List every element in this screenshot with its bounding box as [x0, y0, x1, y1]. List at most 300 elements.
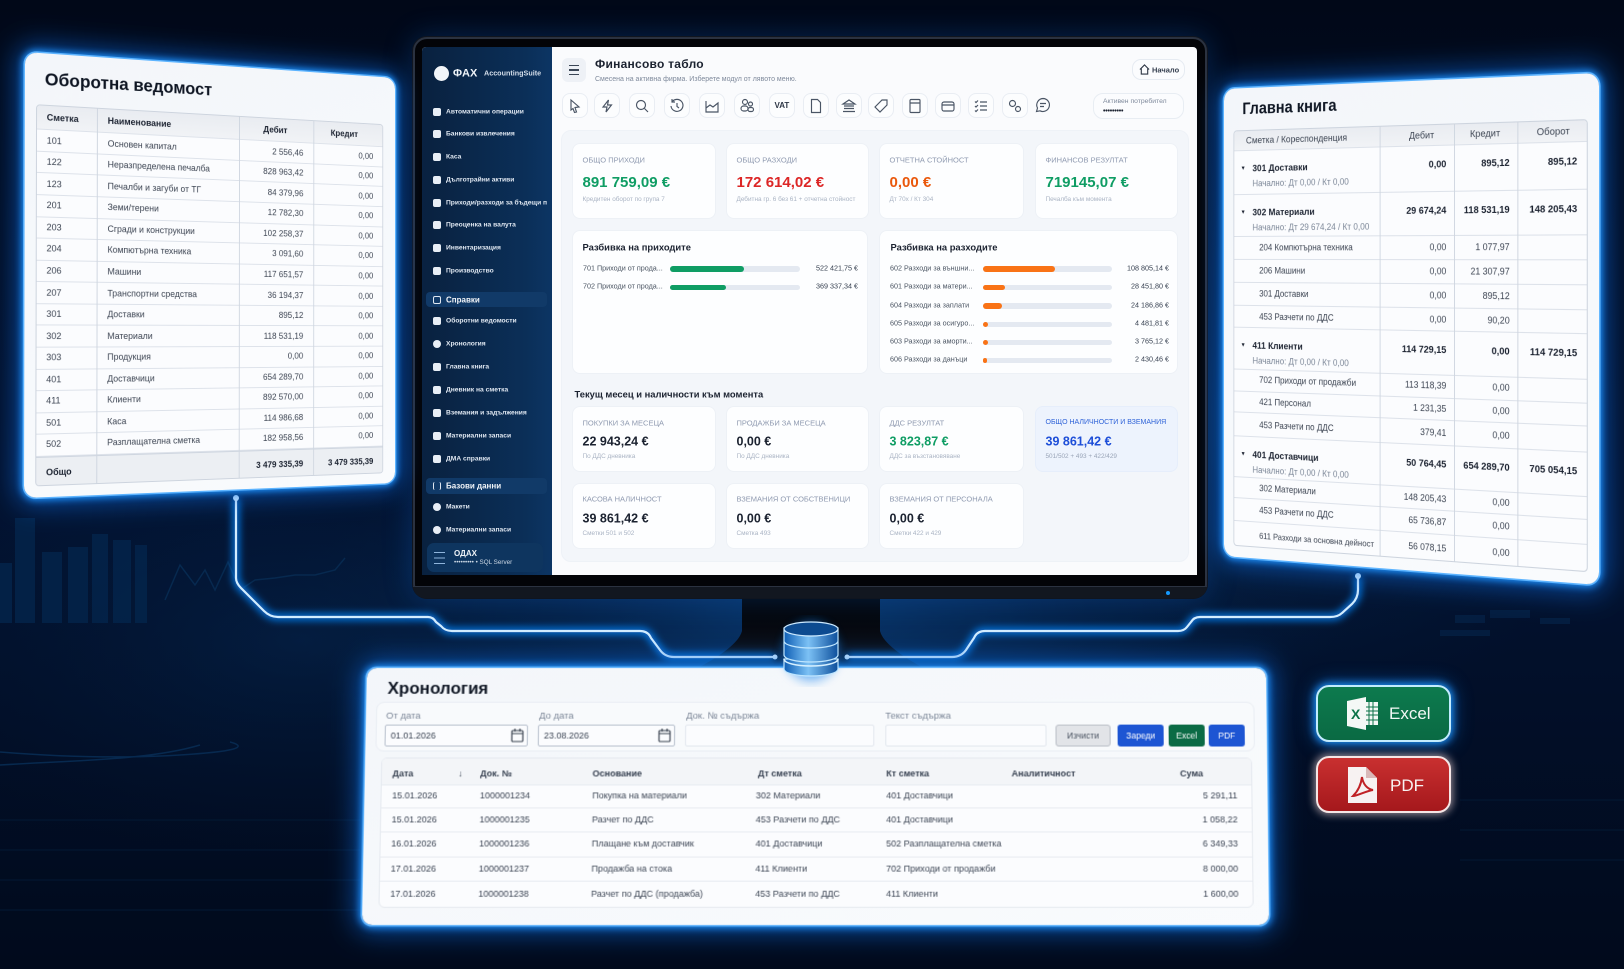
card: staff receivables: 0,00 € — [890, 512, 924, 526]
row: 302 Материали — [756, 790, 820, 800]
row — [37, 217, 382, 247]
date input: to — [538, 725, 675, 747]
monitor bezel chin — [413, 586, 1207, 598]
row: 206 — [46, 266, 62, 276]
account group: 301: 0,00 — [1429, 159, 1446, 171]
row — [379, 881, 1253, 907]
card: total holdings: 39 861,42 € — [1046, 434, 1112, 448]
row: 0,00 — [358, 171, 373, 181]
product name: AccountingSuite — [484, 69, 541, 78]
account group: 411 — [1234, 328, 1586, 380]
row: Разчет по ДДС (продажба) — [591, 888, 703, 898]
card: VAT result: ДДС РЕЗУЛТАТ — [890, 418, 944, 428]
panel: Оборотна ведомост — [24, 52, 395, 498]
sub row: 90,20 — [1488, 314, 1510, 325]
bar row: 605 Разходи за осигуро... — [890, 319, 974, 328]
bar row: 701 Приходи от прода... — [583, 264, 663, 273]
sub row — [1234, 236, 1586, 260]
page subtitle: Смесена на активна фирма. Изберете модул от лявото меню. — [595, 76, 797, 83]
panel: Главна книга — [1224, 73, 1599, 585]
label: Текст съдържа — [885, 711, 951, 722]
tool: tag — [868, 93, 894, 118]
bar row: 522 421,75 € — [816, 264, 858, 273]
sub row — [1234, 260, 1586, 286]
header row: Дебит — [1409, 129, 1434, 141]
bar row: 601 Разходи за матери... — [890, 282, 973, 291]
section highlight: Базови данни — [426, 478, 547, 494]
sub row: 453 Разчети по ДДС — [1259, 420, 1334, 433]
main area — [561, 57, 1189, 562]
row: 122 — [47, 157, 62, 168]
home button — [1132, 59, 1185, 80]
row: 0,00 — [358, 391, 373, 401]
card: VAT result: 3 823,87 € — [890, 434, 949, 448]
date input: from — [385, 725, 528, 747]
account group: 302: Начално: Дт 29 674,24 / Кт 0,00 — [1252, 222, 1369, 233]
header row: Основание — [592, 768, 642, 778]
row — [36, 347, 382, 369]
row: Сгради и конструкции — [107, 224, 195, 236]
menu item: Главна книга — [446, 364, 489, 370]
button: clear — [1055, 725, 1111, 747]
row — [380, 857, 1252, 881]
row — [36, 367, 382, 391]
section heading: Текущ месец и наличности към момента — [574, 388, 763, 399]
sub row: 0,00 — [1430, 314, 1446, 324]
tool: calculator — [902, 93, 928, 118]
row: 12 782,30 — [268, 208, 303, 218]
row — [36, 282, 382, 307]
row: 401 — [46, 374, 61, 384]
sub row: 301 Доставки — [1259, 289, 1308, 299]
row: 0,00 — [358, 311, 373, 320]
row: 702 Приходи от продажби — [886, 863, 995, 873]
sub row: 0,00 — [1492, 429, 1510, 441]
row: 204 — [46, 244, 62, 254]
row: 118 531,19 — [264, 331, 303, 341]
row: 0,00 — [358, 231, 373, 241]
menu item: Оборотни ведомости — [446, 318, 517, 324]
menu item: Приходи/разходи за бъдещи п — [446, 200, 547, 206]
bar row — [890, 355, 1169, 364]
row — [37, 173, 382, 207]
row: Доставки — [107, 309, 145, 320]
row: Продукция — [107, 352, 151, 362]
bar row: 603 Разходи за аморти... — [890, 337, 973, 346]
tool: document — [803, 93, 829, 118]
sub row: 421 Персонал — [1259, 397, 1311, 409]
row: 411 Клиенти — [755, 863, 807, 873]
card: cash: КАСОВА НАЛИЧНОСТ — [582, 494, 662, 504]
tool: history — [664, 93, 690, 118]
text input: text — [885, 725, 1047, 747]
card: total holdings: ОБЩО НАЛИЧНОСТИ И ВЗЕМАНИЯ — [1046, 419, 1166, 426]
bar row — [890, 264, 1169, 273]
row — [36, 304, 382, 327]
card: cash: Сметки 501 и 502 — [582, 530, 634, 537]
row: 16.01.2026 — [391, 838, 437, 848]
screen — [422, 47, 1197, 575]
account group: 411: 0,00 — [1492, 346, 1510, 358]
row — [36, 406, 382, 435]
row: 0,00 — [358, 331, 373, 340]
tool: card — [935, 93, 961, 118]
card: financial result: Печалба към момента — [1046, 196, 1112, 203]
row: 411 Клиенти — [886, 888, 938, 898]
account group: 302: 302 Материали — [1252, 207, 1315, 218]
bar row — [890, 337, 1169, 346]
row: 401 Доставчици — [755, 838, 822, 848]
monitor stand — [702, 599, 919, 666]
header row — [1234, 120, 1586, 152]
row: 502 — [46, 439, 61, 450]
account group: 401: 654 289,70 — [1463, 460, 1510, 474]
heading: Оборотна ведомост — [45, 69, 212, 99]
header row — [37, 105, 382, 148]
row: 207 — [46, 287, 61, 298]
menu item — [433, 153, 462, 161]
heading: Хронология — [387, 679, 488, 698]
card: cash — [572, 483, 716, 549]
row: 3 091,60 — [272, 249, 303, 259]
card: owner receivables — [726, 483, 869, 549]
sub row: 56 078,15 — [1408, 541, 1446, 554]
row: 0,00 — [358, 151, 373, 161]
row — [37, 130, 382, 167]
row: 1000001238 — [478, 888, 529, 898]
card: VAT result — [879, 406, 1024, 472]
row — [37, 239, 382, 267]
row: Разплащателна сметка — [107, 436, 200, 448]
sub row: 0,00 — [1492, 547, 1510, 559]
button: pdf: PDF — [1218, 731, 1235, 741]
home button: Начало — [1152, 66, 1179, 74]
card: staff receivables — [879, 483, 1024, 549]
header row: Дебит — [263, 124, 287, 135]
card: total income: 891 759,09 € — [582, 174, 670, 191]
row: Клиенти — [107, 395, 141, 405]
button: clear: Изчисти — [1067, 731, 1099, 741]
menu item: Преоценка на валута — [446, 222, 516, 228]
tool: settings — [1002, 93, 1028, 118]
sub row: 0,00 — [1430, 266, 1446, 277]
server name: ••••••••• • SQL Server — [454, 559, 512, 566]
bar row: 2 430,46 € — [1135, 355, 1169, 364]
row: 303 — [46, 352, 61, 363]
sub row — [1234, 283, 1586, 310]
sub row — [1234, 391, 1586, 427]
sub row: 1 231,35 — [1413, 402, 1446, 414]
row: 0,00 — [358, 271, 373, 280]
tool: cursor — [562, 93, 588, 118]
bar row: 369 337,34 € — [816, 282, 858, 291]
total row: 3 479 335,39 — [328, 456, 373, 467]
account group: 301: 895,12 — [1548, 156, 1577, 168]
row: 1000001236 — [479, 838, 530, 848]
heading: Разбивка на приходите — [582, 241, 691, 252]
sub row: 206 Машини — [1259, 266, 1305, 276]
active user — [1093, 93, 1184, 119]
account group: 401: 705 054,15 — [1529, 463, 1577, 478]
row: 1000001235 — [479, 814, 530, 824]
menu item — [433, 455, 490, 463]
row: 0,00 — [358, 211, 373, 221]
row — [37, 195, 382, 227]
row — [37, 152, 382, 187]
account group: 302: ▾ — [1242, 209, 1245, 216]
card: reporting value: ОТЧЕТНА СТОЙНОСТ — [890, 156, 969, 164]
sub row: 0,00 — [1492, 405, 1510, 416]
card: total income: Кредитен оборот по група 7 — [582, 196, 665, 203]
bar row: 24 186,86 € — [1131, 301, 1169, 310]
logo mark — [434, 66, 449, 81]
account group: 411: ▾ — [1242, 342, 1245, 349]
card: sales: 0,00 € — [736, 434, 771, 448]
row: Материали — [107, 331, 153, 341]
header row: Кт сметка — [886, 768, 929, 778]
card: owner receivables: Сметка 493 — [736, 530, 771, 537]
account group: 302: 118 531,19 — [1464, 204, 1510, 216]
button: load — [1118, 725, 1164, 747]
card: total income — [572, 143, 716, 219]
row: 411 — [46, 396, 61, 406]
bar row — [583, 282, 858, 291]
row: 654 289,70 — [263, 372, 303, 382]
header row: Док. № — [480, 768, 512, 778]
sub row — [1234, 306, 1586, 334]
bar row — [890, 319, 1169, 328]
button: excel — [1169, 725, 1205, 747]
row: Доставчици — [107, 373, 155, 384]
menu item: Материални запаси — [446, 432, 511, 440]
sub row: 379,41 — [1420, 426, 1446, 438]
account group: 302: 148 205,43 — [1529, 203, 1577, 216]
menu item: Банкови извлечения — [446, 130, 515, 138]
sub row: 0,00 — [1492, 382, 1510, 393]
account group: 301: ▾ — [1242, 165, 1245, 172]
card: cash: 39 861,42 € — [582, 512, 649, 526]
header row: Кредит — [1470, 127, 1500, 140]
card: financial result: 719145,07 € — [1046, 174, 1129, 191]
row: Разчет по ДДС — [592, 814, 654, 824]
row — [36, 326, 382, 348]
row: 1000001234 — [480, 790, 530, 800]
account group: 301 — [1234, 142, 1586, 195]
account group: 301: 895,12 — [1481, 157, 1510, 170]
header row: Сметка / Кореспонденция — [1246, 132, 1347, 146]
label: От дата — [386, 711, 421, 722]
account group: 302 — [1234, 190, 1586, 237]
bar row — [583, 264, 858, 273]
label: До дата — [539, 711, 574, 722]
table — [378, 757, 1254, 908]
header row: Дата — [392, 768, 414, 778]
row: Каса — [107, 416, 126, 427]
label: Док. № съдържа — [686, 711, 759, 722]
section: Базови данни: Базови данни — [446, 482, 501, 490]
button: excel: Excel — [1176, 731, 1197, 741]
row: 15.01.2026 — [392, 790, 437, 800]
row — [36, 426, 382, 457]
sub row: 0,00 — [1492, 520, 1510, 532]
date input: to: 23.08.2026 — [544, 730, 589, 740]
row: 17.01.2026 — [390, 888, 436, 898]
row: Покупка на материали — [592, 790, 687, 800]
sub row: 453 Разчети по ДДС — [1259, 311, 1334, 322]
account group: 401: Начално: Дт 0,00 / Кт 0,00 — [1252, 465, 1349, 480]
bar row: 108 805,14 € — [1127, 264, 1169, 273]
row: 36 194,37 — [268, 290, 303, 300]
sub row: 21 307,97 — [1471, 266, 1510, 277]
bar row: 28 451,80 € — [1131, 282, 1169, 291]
row: 0,00 — [358, 351, 373, 360]
sub row: 302 Материали — [1259, 483, 1316, 497]
total row: Общо — [46, 466, 72, 477]
row: 2 556,46 — [272, 147, 303, 157]
tool: chart — [699, 93, 725, 118]
sub row: 65 736,87 — [1408, 515, 1446, 528]
sub row: 453 Разчети по ДДС — [1259, 505, 1334, 520]
icon: excel: X — [1351, 706, 1361, 722]
button: pdf — [1209, 725, 1245, 747]
row: 0,00 — [358, 431, 373, 441]
menu item: ДМА справки — [446, 456, 490, 462]
sub row — [1234, 498, 1586, 545]
row: 301 — [46, 309, 61, 319]
row: 0,00 — [288, 351, 303, 361]
bar row: 3 765,12 € — [1135, 337, 1169, 346]
menu button — [562, 58, 586, 82]
text input: doc — [685, 725, 874, 747]
logo — [434, 66, 541, 81]
panel: expense breakdown — [879, 230, 1178, 374]
button: Excel export — [1316, 685, 1451, 742]
card: sales: По ДДС дневника — [736, 453, 789, 460]
firm name: ОДАХ — [454, 549, 477, 558]
row: 0,00 — [358, 411, 373, 421]
bar row: 4 481,81 € — [1135, 319, 1169, 328]
account group: 401: ▾ — [1242, 451, 1245, 458]
menu item: Производство — [446, 268, 494, 274]
row: 828 963,42 — [263, 167, 303, 178]
header row: Оборот — [1537, 125, 1570, 138]
account group: 411: 114 729,15 — [1530, 347, 1577, 360]
card: purchases: ПОКУПКИ ЗА МЕСЕЦА — [582, 418, 664, 428]
card: staff receivables: ВЗЕМАНИЯ ОТ ПЕРСОНАЛА — [890, 494, 993, 504]
database icon — [434, 552, 445, 564]
account group: 411: 411 Клиенти — [1252, 341, 1303, 353]
card: owner receivables: ВЗЕМАНИЯ ОТ СОБСТВЕНИЦИ — [736, 494, 850, 504]
menu item — [433, 340, 486, 348]
date input: from: 01.01.2026 — [391, 730, 436, 740]
row: 401 Доставчици — [886, 790, 953, 800]
row: 123 — [47, 179, 62, 189]
bar row — [890, 282, 1169, 291]
row: 6 349,33 — [1203, 838, 1238, 848]
row: 203 — [46, 222, 62, 233]
tool: VAT — [769, 93, 795, 118]
header row — [382, 758, 1251, 784]
menu item: Дневник на сметка — [446, 386, 508, 394]
row: 892 570,00 — [263, 392, 303, 402]
page title: Финансово табло — [595, 57, 704, 71]
sub row: 1 077,97 — [1475, 242, 1510, 253]
total row: 3 479 335,39 — [256, 459, 303, 470]
card: total expenses: Дебитна гр. 6 без 61 + отчетна стойност — [736, 196, 855, 203]
table — [1233, 119, 1587, 572]
card: reporting value: Дт 70x / Кт 304 — [890, 196, 933, 203]
card: purchases — [572, 406, 716, 472]
row: Плащане към доставчик — [592, 838, 694, 848]
menu item: Хронология — [446, 340, 486, 348]
card: reporting value: 0,00 € — [890, 174, 931, 191]
sidebar footer — [427, 543, 543, 572]
active user: ••••••••• — [1103, 108, 1123, 115]
active user: Активен потребител — [1103, 98, 1167, 105]
sub row: 702 Приходи от продажби — [1259, 375, 1356, 388]
sub row: 204 Компютърна техника — [1259, 242, 1353, 253]
filter bar — [375, 702, 1255, 751]
bar row: 702 Приходи от прода... — [583, 282, 663, 291]
row: 895,12 — [279, 311, 303, 320]
heading: Разбивка на разходите — [890, 241, 998, 252]
row: 502 Разплащателна сметка — [886, 838, 1001, 848]
card: owner receivables: 0,00 € — [736, 512, 771, 526]
row: 15.01.2026 — [392, 814, 437, 824]
row: Транспортни средства — [107, 288, 197, 299]
header row: Сума — [1180, 768, 1203, 778]
sub row: 0,00 — [1430, 242, 1446, 253]
menu item: Материални запаси — [446, 526, 511, 534]
row: 0,00 — [358, 191, 373, 201]
sub row — [1234, 477, 1586, 520]
row — [36, 386, 382, 413]
menu item — [433, 503, 470, 511]
sub row: 0,00 — [1492, 497, 1510, 509]
header row: Дт сметка — [758, 768, 802, 778]
panel: income breakdown — [572, 230, 868, 374]
bar row: 604 Разходи за заплати — [890, 301, 969, 310]
tool: checklist — [968, 93, 994, 118]
account group: 401: 50 764,45 — [1406, 457, 1446, 471]
row: Печалби и загуби от ТГ — [108, 181, 201, 194]
icon: pdf — [1348, 767, 1377, 803]
icon: database cylinder — [776, 615, 846, 687]
row: 0,00 — [358, 251, 373, 261]
card: reporting value — [879, 143, 1024, 219]
row: Неразпределена печалба — [108, 160, 210, 174]
account group: 302: 29 674,24 — [1406, 205, 1446, 217]
row — [36, 260, 382, 287]
icon: excel — [1347, 697, 1378, 730]
sub row — [1234, 369, 1586, 403]
row: 8 000,00 — [1203, 863, 1238, 873]
card: total income: ОБЩО ПРИХОДИ — [582, 156, 645, 164]
row: Земи/терени — [108, 202, 159, 214]
card: total expenses — [726, 143, 869, 219]
sub row: 148 205,43 — [1404, 492, 1446, 505]
row — [381, 784, 1252, 807]
row: 117 651,57 — [264, 269, 303, 279]
row: 0,00 — [358, 291, 373, 300]
sidebar — [422, 47, 552, 575]
header row: Сметка — [47, 112, 79, 124]
card: total holdings — [1035, 406, 1178, 472]
card: purchases: По ДДС дневника — [582, 453, 635, 460]
panel: Хронология — [362, 668, 1269, 925]
header row: ↓ — [458, 768, 463, 778]
row: 84 379,96 — [268, 187, 303, 198]
